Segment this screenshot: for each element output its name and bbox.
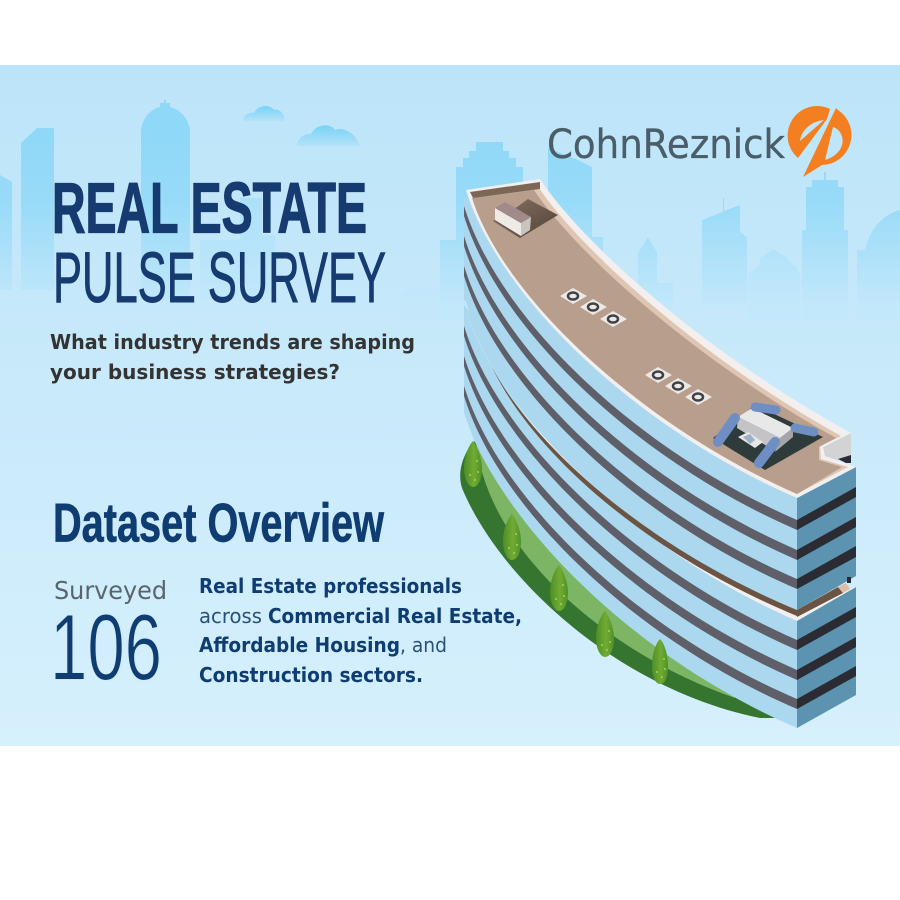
lower block front facade xyxy=(464,305,797,728)
description text: Affordable Housing xyxy=(199,633,400,657)
subtitle xyxy=(50,330,415,384)
heading: dataset overview: Dataset Overview xyxy=(53,492,384,554)
description text: Construction sectors. xyxy=(199,663,423,687)
roof deck xyxy=(472,190,842,494)
title line 2: PULSE SURVEY xyxy=(53,239,386,318)
description text: , and xyxy=(400,633,447,657)
lower block side face xyxy=(797,587,856,728)
description text: Commercial Real Estate, xyxy=(268,604,522,628)
cloud small xyxy=(243,106,285,121)
mid-level ledge xyxy=(466,310,797,621)
description text: Real Estate professionals xyxy=(199,574,462,598)
upper block front facade xyxy=(464,195,797,610)
description text xyxy=(199,574,522,687)
rooftop HVAC unit xyxy=(713,405,823,470)
roof vents group 2 xyxy=(645,367,712,405)
logo wordmark: CohnReznick xyxy=(547,122,786,168)
skyline left xyxy=(0,100,603,320)
floor stripes on side xyxy=(797,487,856,709)
roof back wall xyxy=(470,182,540,198)
logo icon xyxy=(788,106,851,177)
label: surveyed: Surveyed xyxy=(54,576,167,605)
description text: across xyxy=(199,604,262,628)
ground: dark green lawn xyxy=(460,440,775,718)
building xyxy=(464,179,856,728)
subtitle: your business strategies? xyxy=(50,360,340,384)
floor stripes on front xyxy=(464,206,797,709)
background panel xyxy=(0,65,900,746)
title line 1: REAL ESTATE xyxy=(52,170,367,248)
skyline right xyxy=(548,148,900,320)
roof outline xyxy=(466,179,856,498)
mid-level ledge side xyxy=(797,577,856,621)
roof elevator box xyxy=(493,199,558,238)
tree 4 xyxy=(596,611,614,657)
roof parapet band xyxy=(472,185,848,494)
upper block side face xyxy=(797,467,856,610)
number: 106: 106 xyxy=(50,594,162,700)
cloud large xyxy=(297,125,360,146)
tree 1 xyxy=(464,441,482,487)
tree 2 xyxy=(503,514,521,560)
ground: light green lawn xyxy=(476,442,735,698)
roof vents group 1 xyxy=(560,288,627,327)
tree 3 xyxy=(550,565,568,611)
rooftop notch box xyxy=(820,433,851,463)
tree 5 xyxy=(652,639,668,684)
subtitle: What industry trends are shaping xyxy=(50,330,415,354)
